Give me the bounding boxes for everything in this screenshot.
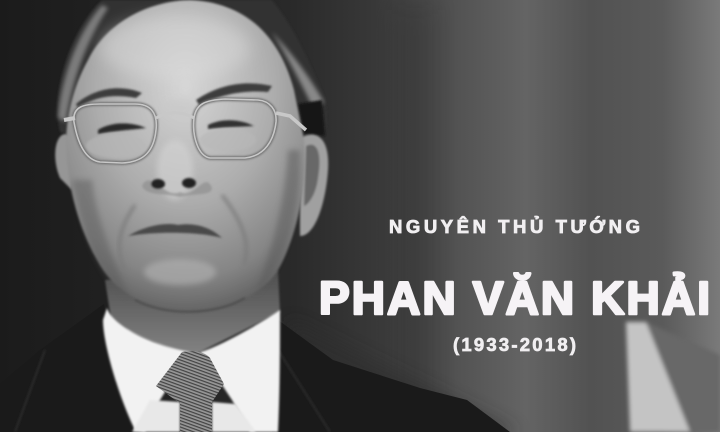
- shirt front: [132, 400, 256, 432]
- shirt collar: [103, 308, 280, 432]
- years: (1933-2018): [453, 334, 576, 355]
- suit: [0, 304, 510, 432]
- hair: [58, 0, 327, 136]
- flag highlight: [626, 322, 720, 432]
- face shading: [72, 99, 300, 312]
- eyes: [86, 120, 256, 158]
- left ear: [55, 134, 76, 190]
- subtitle: NGUYÊN THỦ TƯỚNG: [389, 216, 640, 237]
- lapel lines: [15, 350, 330, 432]
- face: [66, 0, 305, 311]
- tie: [156, 351, 224, 432]
- eyebrows: [76, 83, 272, 108]
- forehead light: [100, 16, 250, 80]
- glasses: [64, 99, 306, 163]
- nose: [142, 178, 212, 197]
- portrait: [0, 0, 510, 432]
- mouth: [128, 224, 222, 238]
- right ear: [300, 135, 328, 236]
- name heading: PHAN VĂN KHẢI: [319, 272, 710, 324]
- neck: [105, 270, 280, 358]
